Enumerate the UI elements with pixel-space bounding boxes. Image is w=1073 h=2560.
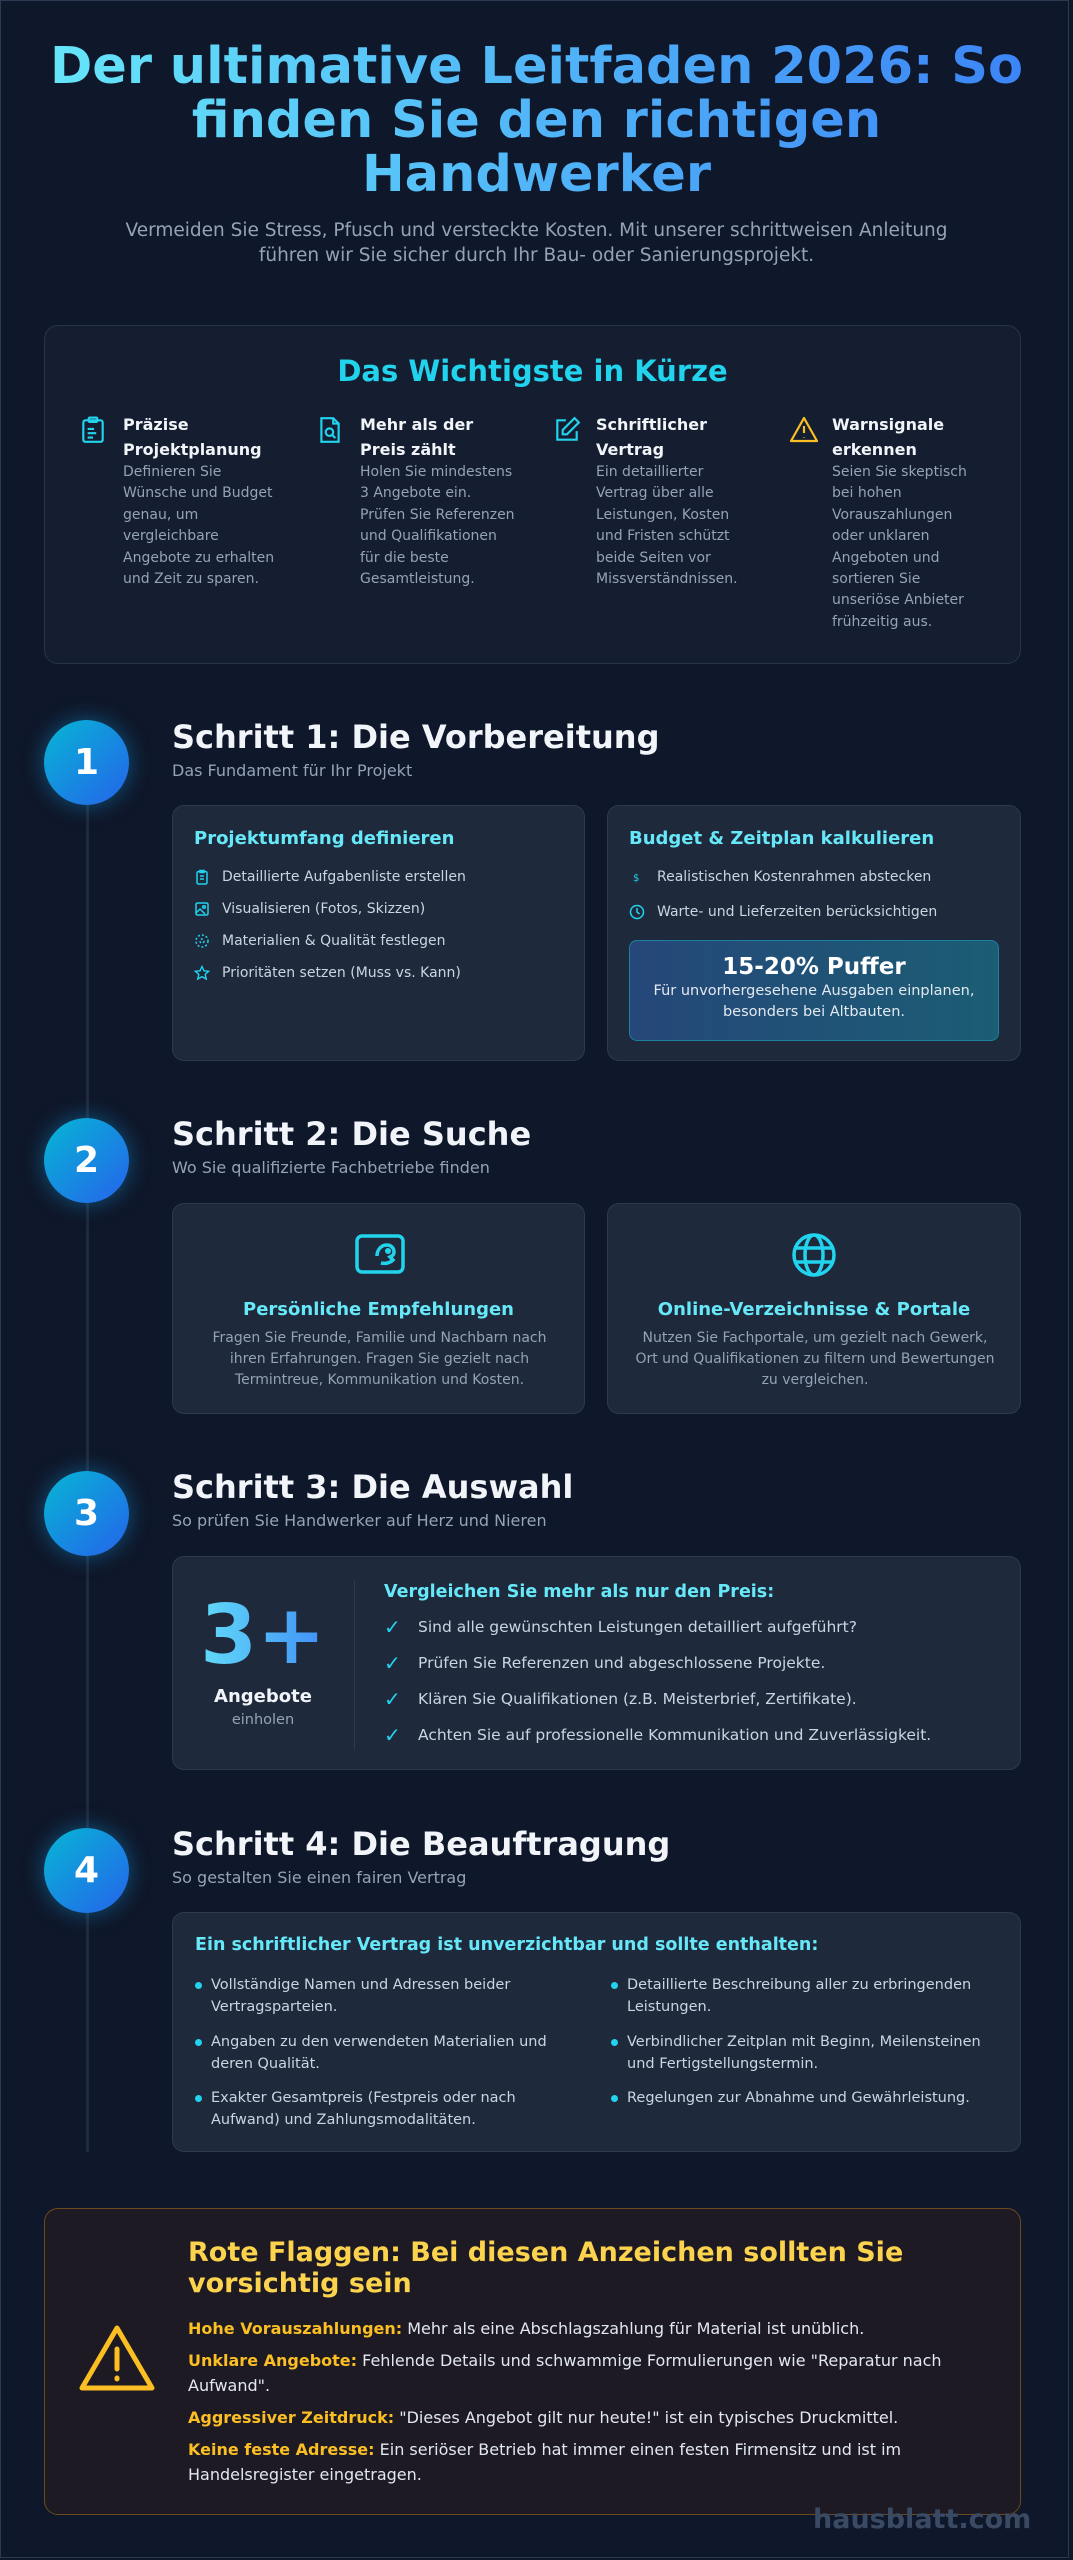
icon: clipboard: [82, 416, 104, 443]
icon: pen: [556, 416, 580, 441]
summary item: Preis: [320, 415, 515, 587]
timeline line: [86, 800, 89, 2152]
icon: globe: [792, 1233, 836, 1277]
stat: 3+: Angebote: [214, 1686, 312, 1707]
card: Budget: [607, 805, 1021, 1061]
title: Der ultimative Leitfaden 2026: So finden Sie den richtigen Handwerker: [50, 37, 1023, 204]
step 3 circle: [44, 1471, 129, 1556]
callout: Puffer: [629, 940, 999, 1041]
step 2 circle: 2: [74, 1140, 99, 1181]
summary item: Vertrag: Ein detaillierter Vertrag über alle Leistungen, Kosten und Fristen schützt beide Seiten vor Missverständnissen.: [596, 464, 738, 587]
card: Projektumfang: Detaillierte Aufgabenliste erstellen: [222, 869, 466, 885]
icon: speech: [355, 1234, 405, 1274]
summary item: Projektplanung: Definieren Sie Wünsche und Budget genau, um vergleichbare Angebote zu erhalten und Zeit zu sparen.: [123, 464, 274, 587]
red flags list: Keine feste Adresse: Ein seriöser Betrieb hat immer einen festen Firmensitz und ist im Handelsregister eingetragen.: [188, 2440, 901, 2484]
step 1 circle: 1: [74, 742, 99, 783]
card: Projektumfang: Visualisieren (Fotos, Skizzen): [222, 901, 425, 917]
card: Budget: $: [633, 873, 639, 884]
stat: 3+: 3+: [200, 1588, 326, 1683]
callout: Puffer: Für unvorhergesehene Ausgaben einplanen,: [654, 983, 974, 999]
step 2 heading: Schritt 2: Die Suche: [172, 1115, 531, 1153]
card: Vertrag: Vollständige Namen und Adressen beider Vertragsparteien.: [211, 1977, 510, 2015]
card: Vertrag: Verbindlicher Zeitplan mit Beginn, Meilensteinen und Fertigstellungstermin.: [627, 2034, 981, 2072]
checklist: ✓: [384, 1615, 401, 1639]
step 2 subtitle: Wo Sie qualifizierte Fachbetriebe finden: [172, 1158, 490, 1177]
red flags list: Unklare Angebote: Fehlende Details und schwammige Formulierungen wie "Reparatur nach Aufwand".: [188, 2351, 942, 2395]
card: Online: Nutzen Sie Fachportale, um gezielt nach Gewerk, Ort und Qualifikationen zu filtern und Bewertungen zu vergleichen.: [635, 1330, 995, 1388]
summary item: Projektplanung: [82, 415, 274, 587]
checklist: Sind alle gewünschten Leistungen detailliert aufgeführt?: [418, 1618, 857, 1636]
card: Projektumfang: [172, 805, 585, 1061]
card: Vertrag: Ein schriftlicher Vertrag ist unverzichtbar und sollte enthalten:: [195, 1935, 818, 1955]
card: Vertrag: Exakter Gesamtpreis (Festpreis oder nach Aufwand) und Zahlungsmodalitäten.: [211, 2090, 516, 2128]
summary item: Preis: Holen Sie mindestens 3 Angebote ein. Prüfen Sie Referenzen und Qualifikationen für die beste Gesamtleistung.: [360, 464, 515, 587]
card: Vertrag: Regelungen zur Abnahme und Gewährleistung.: [627, 2090, 970, 2106]
callout: Puffer: besonders bei Altbauten.: [723, 1004, 905, 1020]
summary item: Warnsignale: [790, 415, 967, 630]
red flags list: Hohe Vorauszahlungen: Mehr als eine Abschlagszahlung für Material ist unüblich.: [188, 2319, 864, 2338]
checklist: Klären Sie Qualifikationen (z.B. Meisterbrief, Zertifikate).: [418, 1690, 857, 1708]
card: Empfehlungen: [172, 1203, 585, 1414]
summary item: Warnsignale: Seien Sie skeptisch bei hohen Vorauszahlungen oder unklaren Angeboten und sortieren Sie unseriöse Anbieter frühzeitig aus.: [832, 464, 967, 630]
panel: red flags: [44, 2208, 1021, 2515]
watermark: hausblatt.com: [813, 2504, 1031, 2535]
card: Empfehlungen: Fragen Sie Freunde, Familie und Nachbarn nach ihren Erfahrungen. Fragen Sie gezielt nach Termintreue, Kommunikation und Kosten.: [212, 1330, 547, 1388]
checklist: Prüfen Sie Referenzen und abgeschlossene Projekte.: [418, 1654, 825, 1672]
red flags list: Aggressiver Zeitdruck: "Dieses Angebot gilt nur heute!" ist ein typisches Druckmittel.: [188, 2408, 898, 2427]
checklist: ✓: [384, 1651, 401, 1675]
checklist: [384, 1582, 931, 1747]
step 3 heading: Schritt 3: Die Auswahl: [172, 1468, 573, 1506]
card: Projektumfang: Materialien & Qualität festlegen: [222, 933, 446, 949]
card: Budget: Budget & Zeitplan kalkulieren: [629, 828, 934, 849]
step 4 circle: 4: [74, 1850, 99, 1891]
checklist: ✓: [384, 1723, 401, 1747]
card: Vertrag: Angaben zu den verwendeten Materialien und deren Qualität.: [211, 2034, 547, 2072]
callout: Puffer: 15-20% Puffer: [722, 954, 906, 980]
step 3 circle: 3: [74, 1493, 99, 1534]
checklist: ✓: [384, 1687, 401, 1711]
summary item: Projektplanung: Präzise Projektplanung: [123, 415, 262, 459]
card: Empfehlungen: Persönliche Empfehlungen: [243, 1299, 514, 1320]
step 1 heading: Schritt 1: Die Vorbereitung: [172, 718, 659, 756]
icon: document search: [320, 417, 340, 443]
checklist: Achten Sie auf professionelle Kommunikation und Zuverlässigkeit.: [418, 1726, 931, 1744]
summary item: Vertrag: Schriftlicher Vertrag: [596, 415, 707, 459]
card: Budget: Warte- und Lieferzeiten berücksichtigen: [657, 904, 937, 920]
card: Vertrag: Detaillierte Beschreibung aller zu erbringenden Leistungen.: [627, 1977, 971, 2015]
card: Auswahl: [172, 1556, 1021, 1770]
summary heading: Das Wichtigste in Kürze: [337, 354, 728, 388]
checklist: Vergleichen Sie mehr als nur den Preis:: [384, 1582, 774, 1602]
stat: 3+: [200, 1588, 326, 1728]
card: Online: Online-Verzeichnisse & Portale: [658, 1299, 970, 1320]
stat: 3+: einholen: [232, 1712, 294, 1728]
step 1 circle: [44, 720, 129, 805]
card: Projektumfang: Prioritäten setzen (Muss vs. Kann): [222, 965, 461, 981]
subtitle: Vermeiden Sie Stress, Pfusch und versteckte Kosten. Mit unserer schrittweisen Anleitung führen wir Sie sicher durch Ihr Bau- oder Sanierungsprojekt.: [125, 220, 948, 266]
step 4 heading: Schritt 4: Die Beauftragung: [172, 1825, 670, 1863]
icon: warning: [790, 416, 818, 442]
summary item: Vertrag: [556, 415, 738, 587]
step 4 subtitle: So gestalten Sie einen fairen Vertrag: [172, 1868, 466, 1887]
icon: warning: [80, 2326, 154, 2390]
red flags heading: Rote Flaggen: Bei diesen Anzeichen sollten Sie vorsichtig sein: [188, 2237, 903, 2299]
step 4 circle: [44, 1828, 129, 1913]
summary item: Warnsignale: Warnsignale erkennen: [832, 415, 944, 459]
card: Budget: Realistischen Kostenrahmen abstecken: [657, 869, 931, 885]
panel: summary: [44, 325, 1021, 664]
card: Vertrag: [172, 1912, 1021, 2152]
summary item: Preis: Mehr als der Preis zählt: [360, 415, 473, 459]
step 3 subtitle: So prüfen Sie Handwerker auf Herz und Nieren: [172, 1511, 547, 1530]
step 2 circle: [44, 1118, 129, 1203]
card: Projektumfang: Projektumfang definieren: [194, 828, 454, 849]
step 1 subtitle: Das Fundament für Ihr Projekt: [172, 761, 412, 780]
card: Online: [607, 1203, 1021, 1414]
red flags list: [188, 2319, 942, 2484]
